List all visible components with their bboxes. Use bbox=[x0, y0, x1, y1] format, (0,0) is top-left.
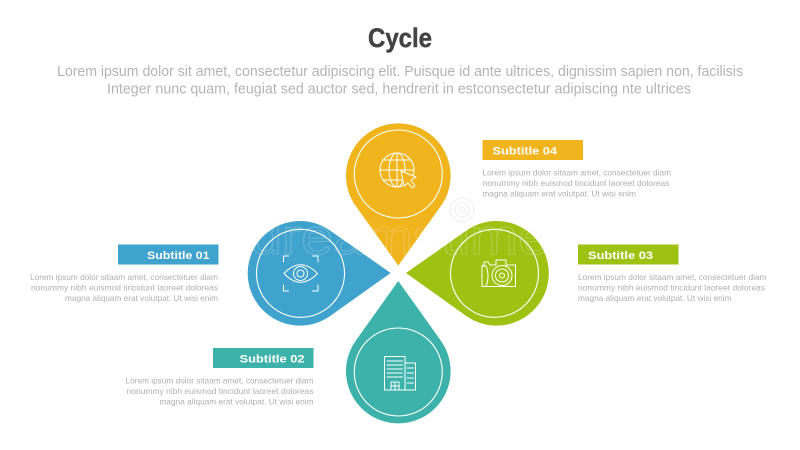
text: subtitle 03 description bbox=[578, 272, 766, 303]
text: subtitle 02 description: nonummy nibh euismod tincidunt laoreet doloreas bbox=[126, 386, 314, 396]
text: subtitle 04 description: magna aliquam erat volutpat. Ut wisi enim bbox=[482, 188, 636, 198]
petal: yellow top bbox=[346, 123, 451, 266]
intro text bbox=[57, 63, 743, 98]
petal: blue left bbox=[248, 221, 391, 326]
text: subtitle 03 description: magna aliquam erat volutpat. Ut wisi enim bbox=[578, 293, 732, 303]
watermark: dreamstime bbox=[250, 209, 550, 265]
label: subtitle 02 bbox=[213, 348, 314, 368]
text: subtitle 04 description: Lorem ipsum dolor sitaam amet, consectetuer diam bbox=[482, 168, 671, 178]
text: subtitle 02 description bbox=[126, 376, 314, 406]
text: subtitle 03 description: Lorem ipsum dolor sitaam amet, consectetuer diam bbox=[578, 272, 766, 282]
text: subtitle 04 description: nonummy nibh euismod tincidunt laoreet doloreas bbox=[482, 178, 670, 188]
text: subtitle 04 description bbox=[482, 168, 671, 198]
icon: camera bbox=[482, 260, 516, 286]
label: subtitle 01: Subtitle 01 bbox=[147, 250, 210, 262]
text: subtitle 01 description: Lorem ipsum dolor sitaam amet, consectetuer diam bbox=[30, 272, 218, 282]
text: subtitle 01 description bbox=[30, 272, 218, 303]
label: subtitle 04: Subtitle 04 bbox=[492, 145, 558, 157]
label: subtitle 02: Subtitle 02 bbox=[240, 353, 304, 365]
intro text: Lorem ipsum dolor sit amet, consectetur adipiscing elit. Puisque id ante ultrices, dignissim sapien non, facilisis bbox=[57, 63, 743, 80]
label: subtitle 03: Subtitle 03 bbox=[588, 250, 653, 262]
icon: globe with cursor bbox=[380, 153, 416, 188]
text: subtitle 01 description: magna aliquam erat volutpat. Ut wisi enim bbox=[65, 293, 218, 303]
petal: teal bottom bbox=[346, 281, 451, 423]
text: subtitle 02 description: magna aliquam erat volutpat. Ut wisi enim bbox=[160, 396, 314, 406]
title: Cycle bbox=[368, 23, 432, 53]
label: subtitle 01 bbox=[118, 244, 218, 264]
icon: eye in focus frame bbox=[284, 256, 318, 291]
text: subtitle 02 description: Lorem ipsum dolor sitaam amet, consectetuer diam bbox=[126, 376, 314, 386]
label: subtitle 04 bbox=[482, 140, 583, 160]
icon: office building bbox=[384, 356, 416, 390]
intro text: Integer nunc quam, feugiat sed auctor sed, hendrerit in estconsectetur adipiscing nte ultrices bbox=[107, 80, 691, 98]
text: subtitle 03 description: nonummy nibh euismod tincidunt laoreet doloreas bbox=[578, 282, 765, 292]
petal: green right bbox=[406, 221, 549, 326]
watermark: dreamstime bbox=[250, 209, 550, 265]
label: subtitle 03 bbox=[578, 244, 678, 264]
text: subtitle 01 description: nonummy nibh euismod tincidunt laoreet doloreas bbox=[31, 282, 218, 292]
